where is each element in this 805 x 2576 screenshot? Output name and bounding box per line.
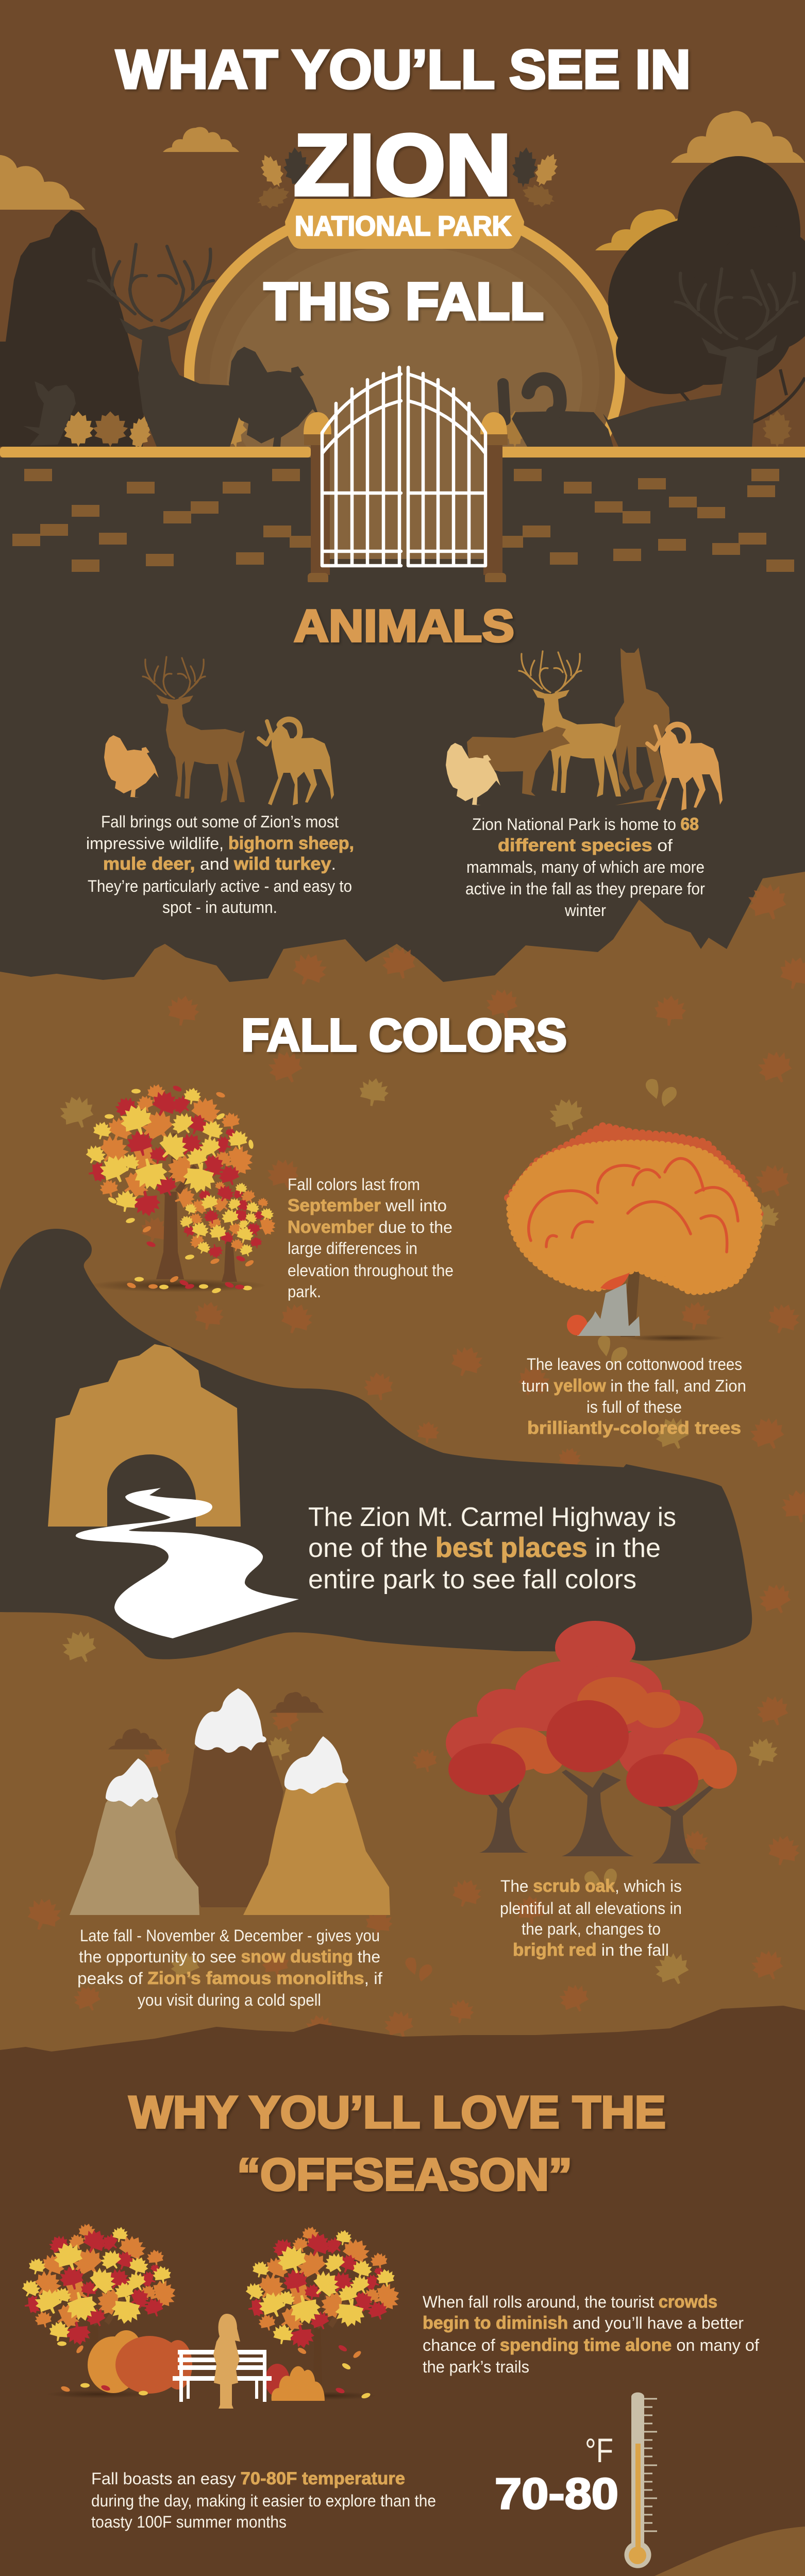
text: fall brings out: spot - in autumn. [162,898,277,917]
bushes left [88,2330,192,2394]
text: temperature: during the day, making it easier to explore than the [91,2492,436,2510]
text: late fall: peaks of Zion’s famous monoliths , if [77,1969,382,1988]
right tree silhouette [608,156,805,422]
snow caps [106,1688,348,1807]
text: temperature: Fall boasts an easy 70-80F temperature [91,2469,405,2488]
animals group left [104,657,334,805]
text: fall brings out: They’re particularly active - and easy to [88,877,352,895]
wall bricks [12,469,794,572]
gate bars [322,367,485,566]
header clouds [0,111,805,250]
text: highway: one of the best places in the [308,1532,661,1563]
falling leaves scene [57,2341,371,2399]
text: 68 species: different species of [498,836,673,855]
heading: why you'll love: WHY YOU’LL LOVE THE [129,2087,666,2138]
cottonwood tree [508,1126,760,1342]
deer silhouette right [603,269,797,447]
maple trees [82,1082,278,1294]
text: fall brings out [86,812,354,917]
text: scrub oak: bright red in the fall [513,1940,669,1960]
small clouds behind peaks [108,1692,324,1750]
scene trunks [89,2324,322,2391]
falling leaves [105,1084,255,1294]
text: late fall: you visit during a cold spell [138,1991,321,2009]
text: cottonwood: The leaves on cottonwood trees [527,1355,742,1374]
text: highway: entire park to see fall colors [308,1565,636,1595]
bench scene [19,2222,404,2409]
scrub oak trees [446,1621,737,1863]
animals group right [446,648,723,810]
text: late fall: Late fall - November & December - gives you [80,1926,380,1945]
text: crowds [423,2292,759,2376]
70-80 value: 70-80 [495,2469,618,2518]
scattered background leaves [23,878,805,2044]
national park plaque: NATIONAL PARK [295,211,511,242]
text: 68 species: Zion National Park is home to 68 [472,815,699,834]
text: fall brings out: Fall brings out some of Zion’s most [101,812,339,831]
heading: fall colors: FALL COLORS [241,1010,567,1061]
degrees label: °F [585,2431,613,2469]
orange canopy [510,1143,759,1292]
dark hill [0,1229,752,1661]
oak foliage orange [490,1677,737,1789]
panel: offseason [0,2006,805,2576]
text: cottonwood [522,1355,746,1438]
text: temperature [91,2469,436,2531]
text: fall colors last: large differences in [288,1239,417,1258]
header section [0,0,805,612]
text: temperature: toasty 100F summer months [91,2513,287,2531]
text: cottonwood: turn yellow in the fall, and Zion [522,1376,746,1396]
turkey silhouette [229,347,320,450]
winding road [76,1488,299,1638]
monolith mountains [70,1688,390,1915]
text: fall colors last: Fall colors last from [288,1175,420,1194]
text: fall colors last: park. [288,1282,321,1301]
upper red canopy [508,1126,760,1236]
title: this fall: THIS FALL [264,272,544,331]
text: cottonwood: brilliantly-colored trees [527,1418,741,1438]
horse [615,648,670,805]
lower wave band [0,2527,805,2576]
text: fall brings out: impressive wildlife, bighorn sheep, [86,834,354,853]
text: scrub oak: plentiful at all elevations in [500,1899,682,1918]
text: highway [308,1502,676,1595]
text: scrub oak [500,1876,682,1960]
canopy red arcs [529,1159,738,1252]
rock [577,1283,640,1336]
thermometer [625,2393,657,2568]
text: crowds: When fall rolls around, the tourist crowds [423,2292,717,2312]
text: scrub oak: The scrub oak, which is [500,1876,682,1896]
oak trunks [479,1770,716,1863]
heading: offseason: “OFFSEASON” [237,2149,572,2200]
header leaves behind animals [63,396,792,452]
tunnel [48,1344,241,1527]
text: fall colors last [288,1175,454,1301]
text: fall brings out: mule deer, and wild turkey . [103,854,336,874]
stone wall [0,447,805,612]
text: fall colors last: elevation throughout the [288,1261,454,1280]
text: 68 species: mammals, many of which are more [466,858,705,876]
arch behind title [184,197,625,550]
text: 68 species: winter [564,901,606,920]
oak foliage dark red [448,1700,698,1807]
text: highway: The Zion Mt. Carmel Highway is [308,1502,676,1532]
text: crowds: the park’s trails [423,2358,529,2376]
oak foliage main [446,1621,722,1779]
title: zion: ZION [294,116,511,213]
text: fall colors last: September well into [288,1196,447,1215]
bushes right [265,2364,325,2401]
text: fall colors last: November due to the [288,1217,452,1237]
text: crowds: chance of spending time alone on many of [423,2335,759,2355]
deer silhouette left [89,244,242,447]
heading: animals: ANIMALS [294,600,514,651]
cow [467,726,570,796]
text: late fall: the opportunity to see snow dusting the [79,1947,380,1967]
text: late fall [77,1926,382,2009]
title: what you'll see in: WHAT YOU’LL SEE IN [116,39,691,100]
gate posts [304,412,508,584]
text: 68 species: active in the fall as they prepare for [465,879,705,898]
leaves beside ZION [254,146,563,213]
text: scrub oak: the park, changes to [522,1920,661,1938]
bighorn silhouette right [503,379,613,447]
text: cottonwood: is full of these [586,1398,682,1416]
lower red foliage [600,1273,630,1290]
left mountain silhouette [0,210,144,447]
small animal silhouette [23,381,76,446]
bench [173,2350,272,2402]
text: 68 species [465,815,705,920]
gate [304,367,508,584]
woman [213,2314,240,2409]
panel: fall colors [0,872,805,2061]
panel: animals [0,582,805,994]
text: crowds: begin to diminish and you’ll have a better [423,2313,744,2333]
national park plaque [285,199,524,249]
